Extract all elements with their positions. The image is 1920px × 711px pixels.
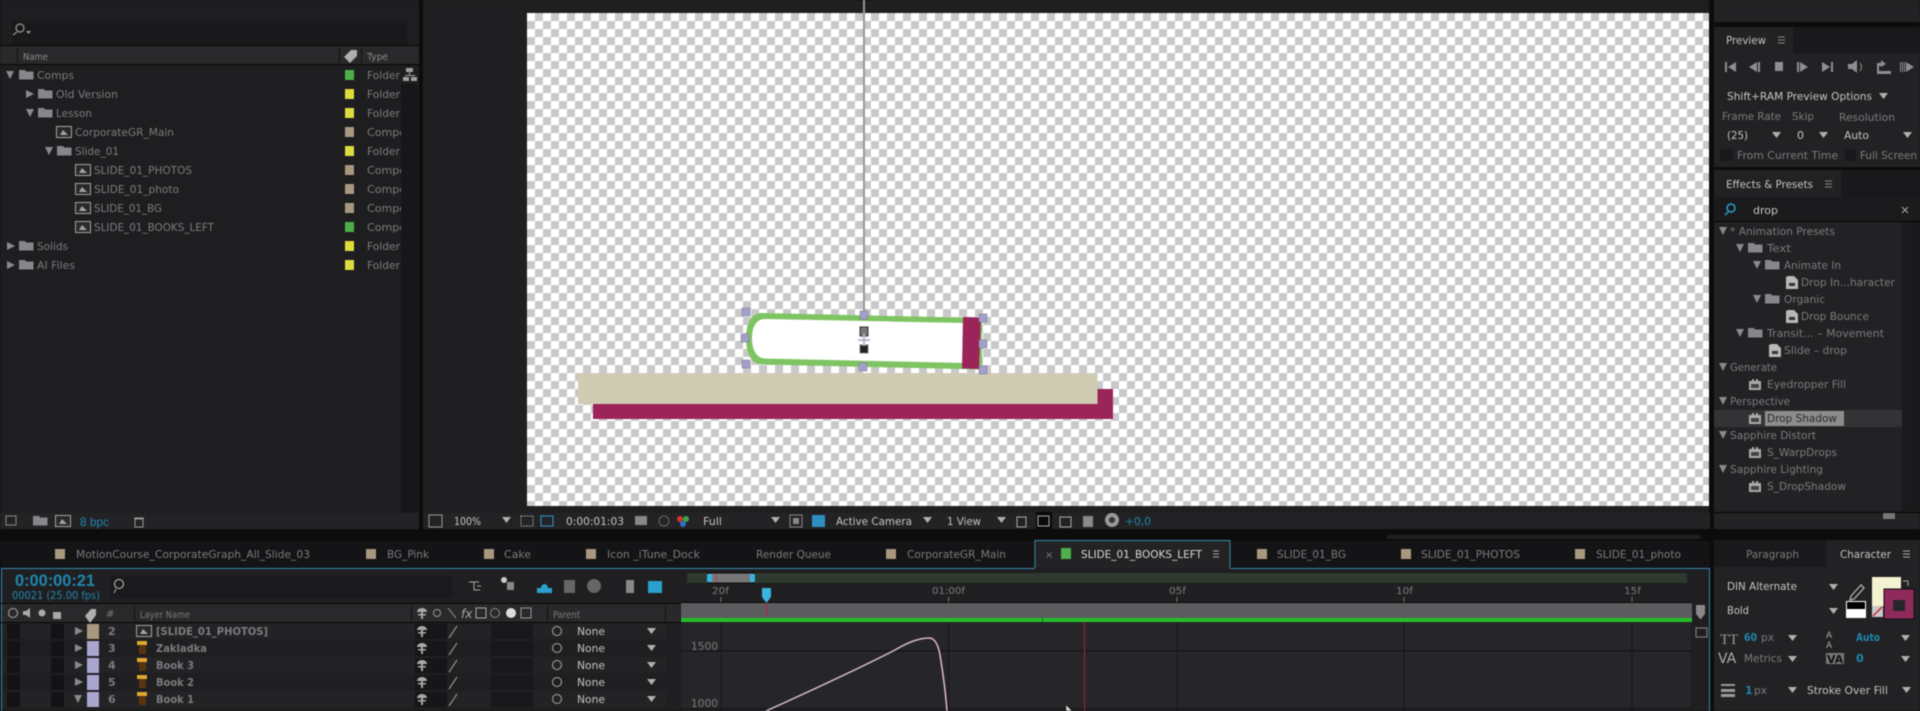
layer row: Book 1: 6: [108, 693, 116, 706]
project column headers: [0, 45, 419, 65]
viewer footer toolbar: +0,0: [1125, 515, 1151, 528]
kerning and tracking: VA: [1827, 653, 1844, 666]
effects tree: S_DropShadow: [1767, 480, 1846, 493]
project type column: [367, 69, 418, 513]
effects tree: Drop Shadow: [1767, 412, 1837, 425]
effects heading: Effects & Presets: [1726, 178, 1813, 191]
graph side strip: [1692, 573, 1709, 711]
highlighted effect row: [1714, 410, 1902, 427]
project type column: Folder: [367, 259, 400, 272]
project type column: Folder: [367, 145, 400, 158]
project tree rows: SLIDE_01_BG: [94, 202, 162, 215]
effects tree: [1719, 225, 1895, 493]
kerning and tracking: Metrics: [1744, 652, 1782, 665]
active tab: SLIDE_01_BOOKS_LEFT: SLIDE_01_BOOKS_LEFT: [1081, 548, 1202, 561]
selection handles: [741, 308, 987, 374]
layer row: SLIDE_01_PHOTOS: None: [577, 625, 605, 638]
RAM preview options: Resolution: [1839, 111, 1895, 124]
project tree rows: Comps: [37, 69, 74, 82]
tab: SLIDE_01_photo: SLIDE_01_photo: [1596, 548, 1681, 561]
bottom book: [578, 373, 1113, 419]
effects tree: Text: [1766, 242, 1792, 255]
project type column: Compo: [367, 221, 406, 234]
font size and leading: px: [1761, 631, 1774, 644]
effects tree: Transit... – Movement: [1766, 327, 1885, 340]
kerning and tracking: [1718, 651, 1910, 667]
RAM preview options: 0: [1797, 129, 1804, 142]
layer row: Book 3: 4: [108, 659, 116, 672]
RAM preview options: Skip: [1792, 110, 1814, 123]
stroke options: px: [1754, 684, 1767, 697]
RAM preview options: Shift+RAM Preview Options: [1727, 90, 1872, 103]
tab: Cake: Cake: [504, 548, 531, 561]
project tree rows: Old Version: [56, 88, 118, 101]
project type column: Compo: [367, 183, 406, 196]
paragraph and character tabs: [1714, 540, 1910, 567]
icon: eyedropper: [1850, 585, 1864, 600]
layer row: Book 3: Book 3: [156, 659, 194, 672]
effects tree: S_WarpDrops: [1767, 446, 1837, 459]
time ruler: 10f: [1396, 586, 1413, 597]
RAM preview options: From Current Time: [1737, 149, 1838, 162]
playhead: [762, 588, 771, 616]
effects tree: Drop In...haracter: [1801, 276, 1895, 289]
work area bar: [681, 602, 1692, 622]
project type column: Folder: [367, 69, 400, 82]
current time: [12, 571, 100, 602]
kerning and tracking: VA: [1718, 651, 1737, 667]
project tree rows: CorporateGR_Main: [75, 126, 174, 139]
RAM preview options: Auto: [1844, 129, 1869, 142]
project type column: Compo: [367, 126, 406, 139]
layer row: Book 3: None: [577, 659, 605, 672]
project type column: Folder: [367, 107, 400, 120]
colour swatches: [1846, 577, 1914, 619]
effects tree: Organic: [1784, 293, 1825, 306]
font size and leading: A: [1826, 631, 1833, 641]
viewer footer toolbar: Active Camera: [836, 515, 912, 528]
layer row: Zakladka: [2, 640, 666, 656]
tab: SLIDE_01_PHOTOS: SLIDE_01_PHOTOS: [1421, 548, 1520, 561]
preview heading: Preview: [1726, 34, 1766, 47]
layer row: Zakladka: None: [577, 642, 605, 655]
layer row: SLIDE_01_PHOTOS: 2: [108, 625, 116, 638]
tab: Cake: [484, 548, 531, 561]
project type column: Folder: [367, 88, 400, 101]
time ruler: 05f: [1169, 586, 1186, 597]
panel: preview: [1714, 0, 1920, 167]
font size and leading: A: [1826, 641, 1833, 651]
project column headers: Name: [23, 52, 48, 63]
effects tree: Slide – drop: [1784, 344, 1847, 357]
project type column: Compo: [367, 164, 406, 177]
effects tree: * Animation Presets: [1730, 225, 1835, 238]
RAM preview options: Full Screen: [1860, 149, 1917, 162]
layer column headers: Layer Name: [140, 610, 190, 621]
panel: character: [1714, 540, 1920, 711]
viewer footer toolbar: 0:00:01:03: [566, 515, 624, 528]
effects tree: Sapphire Lighting: [1730, 463, 1823, 476]
mouse cursor: [1066, 705, 1072, 711]
RAM preview options: [1720, 90, 1917, 162]
graph editor: 1000: [691, 697, 718, 710]
time ruler: 01:00f: [932, 586, 965, 597]
panel divider strip: [1387, 535, 1700, 539]
RAM preview options: (25): [1727, 129, 1748, 142]
value curve: [766, 638, 947, 711]
project tree rows: Lesson: [56, 107, 92, 120]
RAM preview options: Frame Rate: [1722, 110, 1781, 123]
layer row: Zakladka: Zakladka: [156, 642, 207, 655]
layer row: SLIDE_01_PHOTOS: [SLIDE_01_PHOTOS]: [156, 625, 268, 638]
project tree rows: AI Files: [37, 259, 75, 272]
font size and leading: Auto: [1856, 631, 1880, 644]
time navigator: [687, 573, 1687, 583]
stroke options: Stroke Over Fill: [1807, 684, 1888, 697]
graph editor: [681, 622, 1691, 711]
graph editor: 1500: [691, 640, 718, 653]
timeline search: [110, 576, 452, 598]
project tree rows: Slide_01: [75, 145, 119, 158]
time ruler: 20f: [712, 586, 729, 597]
tab: MotionCourse: MotionCourse_CorporateGraph_All_Slide_03: [76, 548, 310, 561]
project type column: Folder: [367, 240, 400, 253]
font family and style: Bold: [1727, 604, 1749, 617]
effects search: drop: [1753, 204, 1778, 217]
effects tree: Animate In: [1784, 259, 1841, 272]
current time: 0:00:00:21: [15, 571, 95, 590]
layer row: Book 2: None: [577, 676, 605, 689]
comp tab bar: [0, 540, 1710, 570]
kerning and tracking: 0: [1856, 652, 1864, 665]
font family and style: [1727, 580, 1838, 617]
layer row: Book 1: None: [577, 693, 605, 706]
project tree rows: [6, 69, 214, 272]
timeline toolbar icons: [469, 577, 662, 593]
project tree rows: Solids: [37, 240, 68, 253]
icon: flowchart: [403, 68, 417, 81]
viewer footer toolbar: Full: [703, 515, 722, 528]
effects tree: Drop Bounce: [1801, 310, 1869, 323]
effects footer: [1714, 512, 1920, 529]
panel: project: [0, 0, 419, 529]
layer row: Book 1: [2, 691, 666, 707]
tab: Icon iTune Dock: Icon _iTune_Dock: [607, 548, 701, 561]
project tree rows: SLIDE_01_photo: [94, 183, 179, 196]
layer row: Book 2: Book 2: [156, 676, 194, 689]
tab: BG_Pink: BG_Pink: [387, 548, 430, 561]
project type column: Compo: [367, 202, 406, 215]
viewer footer toolbar: 100%: [454, 515, 481, 528]
paragraph and character tabs: Paragraph: [1746, 548, 1799, 561]
layer row: Book 2: [2, 674, 666, 690]
active tab: SLIDE_01_BOOKS_LEFT: [1035, 540, 1230, 570]
layer column headers: fx: [461, 607, 473, 621]
project tree rows: SLIDE_01_PHOTOS: [94, 164, 192, 177]
viewer footer toolbar: 1 View: [947, 515, 981, 528]
tab: Render Queue: Render Queue: [756, 548, 831, 561]
transparency checkerboard canvas: [527, 13, 1709, 506]
active tab: SLIDE_01_BOOKS_LEFT: ×: [1045, 550, 1053, 561]
effects search: [1714, 197, 1920, 222]
project tree rows: SLIDE_01_BOOKS_LEFT: [94, 221, 214, 234]
tab: SLIDE_01_BG: SLIDE_01_BG: [1277, 548, 1346, 561]
layer row: SLIDE_01_PHOTOS: [2, 623, 666, 639]
guide line: [863, 0, 865, 314]
project footer: 8 bpc: [80, 515, 109, 529]
top book selected: [746, 313, 982, 370]
search bar: [12, 21, 407, 45]
project footer: [0, 513, 419, 529]
panel: timeline: [1, 568, 1710, 711]
layer row: Book 3: [2, 657, 666, 673]
effects tree: Generate: [1730, 361, 1777, 374]
current time: 00021 (25.00 fps): [12, 589, 100, 602]
layer column headers: #: [106, 609, 114, 620]
tab: BG_Pink: [366, 548, 430, 561]
font size and leading: 60: [1744, 631, 1757, 644]
layer row: Book 1: Book 1: [156, 693, 194, 706]
layer column headers: [1, 603, 681, 623]
panel: viewer: [423, 0, 1714, 530]
stroke options: 1: [1745, 684, 1753, 697]
panel: effects and presets: [1714, 170, 1920, 529]
anchor point cursor: [858, 327, 870, 353]
stroke options: [1721, 684, 1911, 697]
paragraph and character tabs: Character: [1840, 548, 1891, 561]
effects tree: Eyedropper Fill: [1767, 378, 1846, 391]
effects tree: Sapphire Distort: [1730, 429, 1817, 442]
layer row: Book 2: 5: [108, 676, 116, 689]
layer column headers: Parent: [553, 610, 580, 621]
font family and style: DIN Alternate: [1727, 580, 1797, 593]
playback controls: [1725, 60, 1914, 74]
time ruler: 15f: [1624, 586, 1641, 597]
time ruler: [712, 586, 1641, 602]
font size and leading: [1720, 631, 1910, 651]
tab: CorporateGR_Main: CorporateGR_Main: [907, 548, 1006, 561]
viewer footer toolbar: [423, 512, 1710, 530]
layer row: Zakladka: 3: [108, 642, 116, 655]
effects tree: Perspective: [1730, 395, 1790, 408]
project label swatches: [345, 70, 354, 270]
project column headers: Type: [366, 52, 388, 63]
font size and leading: TT: [1720, 632, 1738, 648]
